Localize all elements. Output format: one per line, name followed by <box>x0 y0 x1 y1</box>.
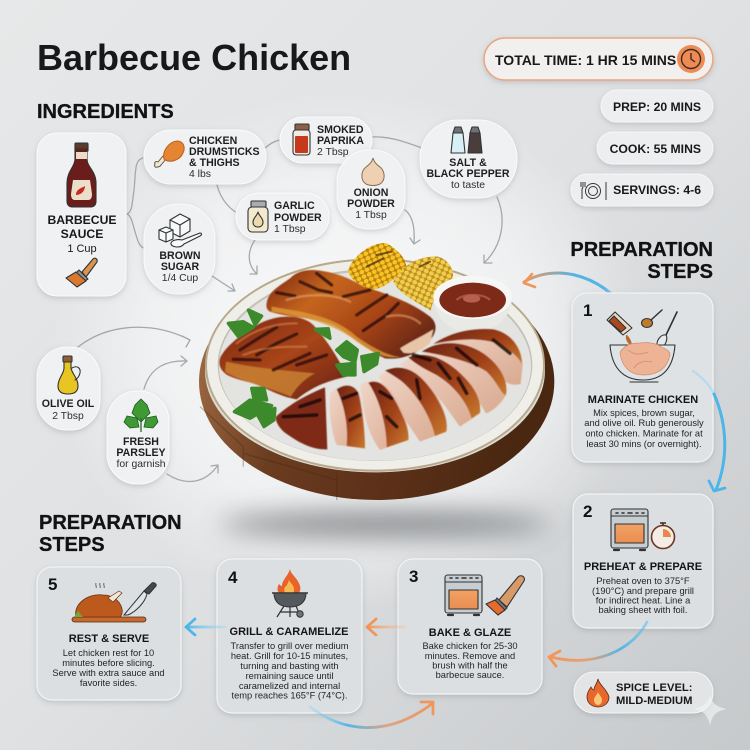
panel: salt and black pepper <box>420 120 517 198</box>
description: heat. Grill for 10-15 minutes, <box>231 651 348 661</box>
description <box>592 576 694 615</box>
pill: servings: SERVINGS: 4-6 <box>613 183 701 197</box>
decorative sparkle <box>693 695 727 726</box>
icon: garlic jar <box>248 201 268 232</box>
panel: fresh parsley: for garnish <box>116 459 166 470</box>
icon: sauce bottle <box>67 143 96 207</box>
description: onto chicken. Marinate for at <box>585 428 703 438</box>
icon: onion <box>362 158 384 186</box>
panel: chicken drumsticks: CHICKEN <box>189 135 237 147</box>
sauce bowl <box>433 276 512 333</box>
card: step 4: GRILL & CARAMELIZE <box>230 626 348 638</box>
description: Mix spices, brown sugar, <box>593 408 695 418</box>
description <box>584 408 704 449</box>
main image: plated barbecue chicken on a wooden board <box>199 243 554 500</box>
parsley garnish <box>228 310 378 427</box>
heading: preparation steps left <box>39 512 182 556</box>
panel: garlic powder: 1 Tbsp <box>274 224 306 235</box>
card: step 1: MARINATE CHICKEN <box>588 394 698 406</box>
icon: clock <box>677 45 705 73</box>
description: and olive oil. Rub generously <box>584 418 704 428</box>
icon: mixing bowl <box>607 310 677 382</box>
heading: preparation steps right <box>570 239 713 283</box>
panel: garlic powder <box>236 193 329 240</box>
panel: brown sugar: SUGAR <box>161 261 199 273</box>
panel: brown sugar <box>144 204 215 294</box>
panel: salt and black pepper: BLACK PEPPER <box>426 168 510 180</box>
card: step 4: 4 <box>228 568 238 587</box>
card: step 2: 2 <box>583 502 592 521</box>
description <box>422 641 518 680</box>
icon: timer <box>652 523 674 548</box>
description: brush with half the <box>432 660 508 670</box>
icon: grill with flame <box>272 569 308 617</box>
description: remaining sauce until <box>246 671 333 681</box>
description: baking sheet with foil. <box>599 605 687 615</box>
drumstick and thigh pieces <box>219 270 436 399</box>
connector arrows between ingredients <box>78 137 502 481</box>
card: step 3: 3 <box>409 567 418 586</box>
panel: smoked paprika: SMOKED <box>317 124 364 136</box>
description: Transfer to grill over medium <box>231 641 349 651</box>
pill: servings <box>571 174 713 206</box>
panel: onion powder: 1 Tbsp <box>355 210 387 221</box>
arrow: step 3 to step 4 <box>367 619 405 635</box>
card: step 5: 5 <box>48 575 57 594</box>
description: for indirect heat. Line a <box>596 596 691 606</box>
panel: chicken drumsticks: DRUMSTICKS <box>189 146 260 158</box>
pill: cook <box>597 132 713 164</box>
description: caramelized and internal <box>239 681 340 691</box>
panel: barbecue sauce <box>37 133 126 296</box>
description: Bake chicken for 25-30 <box>422 641 518 651</box>
time pills <box>484 38 713 206</box>
description: least 30 mins (or overnight). <box>586 439 702 449</box>
pill: cook: COOK: 55 MINS <box>610 142 701 156</box>
description: minutes before slicing. <box>62 658 155 668</box>
pill: prep <box>601 90 713 122</box>
icon: roast chicken and knife <box>72 583 156 622</box>
card: step 1: 1 <box>583 301 592 320</box>
pill: spice level: MILD-MEDIUM <box>616 695 692 707</box>
panel: onion powder: ONION <box>354 187 388 199</box>
description: Let chicken rest for 10 <box>63 648 154 658</box>
panel: salt and black pepper: SALT & <box>449 157 487 169</box>
card: step 1 <box>572 293 713 462</box>
heading: ingredients: INGREDIENTS <box>37 101 174 123</box>
plate shadow <box>220 512 550 536</box>
icon: basting brush <box>66 258 97 287</box>
panel: garlic powder: GARLIC <box>274 200 315 212</box>
panel: barbecue sauce: 1 Cup <box>67 243 97 255</box>
arrow: to step 1 <box>524 273 631 315</box>
panel: brown sugar: 1/4 Cup <box>162 273 198 284</box>
icon: parsley <box>124 399 158 432</box>
panel: fresh parsley: PARSLEY <box>116 447 166 459</box>
arrow: step 1 to step 2 <box>693 371 725 491</box>
description: Serve with extra sauce and <box>52 668 165 678</box>
pill: spice level: SPICE LEVEL: <box>616 682 692 694</box>
panel: onion powder: POWDER <box>347 198 395 210</box>
panel: onion powder <box>337 150 405 229</box>
icon: sugar cubes and spoon <box>159 214 202 247</box>
panel: garlic powder: POWDER <box>274 212 322 224</box>
description: temp reaches 165°F (74°C). <box>232 690 347 700</box>
card: step 5 <box>37 567 181 700</box>
panel: brown sugar: BROWN <box>159 250 201 262</box>
description: turning and basting with <box>240 661 339 671</box>
description: (190°C) and prepare grill <box>592 586 694 596</box>
panel: olive oil: 2 Tbsp <box>52 411 84 422</box>
description: minutes. Remove and <box>425 651 515 661</box>
panel: salt and black pepper: to taste <box>451 180 485 191</box>
description <box>231 641 349 700</box>
card: step 2: PREHEAT & PREPARE <box>584 561 702 573</box>
card: step 3: BAKE & GLAZE <box>429 627 511 639</box>
icon: plate and cutlery <box>581 182 606 200</box>
icon: oven <box>611 509 648 550</box>
arrow: step 2 to step 3 <box>549 622 647 666</box>
card: step 3 <box>398 559 542 694</box>
description: Preheat oven to 375°F <box>596 576 690 586</box>
pill: total time <box>484 38 713 80</box>
card: step 4 <box>217 559 362 713</box>
wooden board <box>199 263 554 500</box>
panel: chicken drumsticks: & THIGHS <box>189 157 240 169</box>
icon: paprika jar <box>293 124 310 155</box>
pill: spice level <box>574 672 713 713</box>
description <box>52 648 165 688</box>
pill: prep: PREP: 20 MINS <box>613 100 701 114</box>
arrow: step 4 to step 5 <box>186 619 225 635</box>
arrow: curved under step 4 to step 3 <box>310 702 433 728</box>
icon: oven <box>445 575 482 615</box>
title: Barbecue Chicken <box>37 37 351 78</box>
corn <box>348 243 453 311</box>
description: favorite sides. <box>80 678 137 688</box>
panel: chicken drumsticks <box>144 130 266 184</box>
icon: flame <box>587 679 609 707</box>
heading: preparation steps right: PREPARATION <box>570 239 713 261</box>
heading: preparation steps right: STEPS <box>647 261 713 283</box>
description: barbecue sauce. <box>436 670 504 680</box>
panel: smoked paprika: 2 Tbsp <box>317 147 349 158</box>
icon: salt and pepper shakers <box>451 127 482 153</box>
panel: olive oil: OLIVE OIL <box>42 398 95 410</box>
icon: basting brush <box>486 576 524 615</box>
icon: drumstick <box>155 141 184 167</box>
card: step 2 <box>573 494 713 628</box>
sliced chicken <box>276 329 523 450</box>
icon: olive oil bottle <box>58 356 80 394</box>
panel: smoked paprika <box>280 117 372 163</box>
pill: total time: TOTAL TIME: 1 HR 15 MINS <box>495 52 676 68</box>
panel: fresh parsley <box>107 391 169 484</box>
panel: smoked paprika: PAPRIKA <box>317 135 364 147</box>
panel: barbecue sauce: BARBECUE <box>47 213 117 227</box>
panel: chicken drumsticks: 4 lbs <box>189 169 211 180</box>
heading: preparation steps left: STEPS <box>39 534 105 556</box>
panel: barbecue sauce: SAUCE <box>61 227 103 241</box>
heading: preparation steps left: PREPARATION <box>39 512 182 534</box>
card: step 5: REST & SERVE <box>69 633 149 645</box>
plate <box>205 258 545 472</box>
panel: olive oil <box>37 347 100 430</box>
panel: fresh parsley: FRESH <box>123 436 159 448</box>
